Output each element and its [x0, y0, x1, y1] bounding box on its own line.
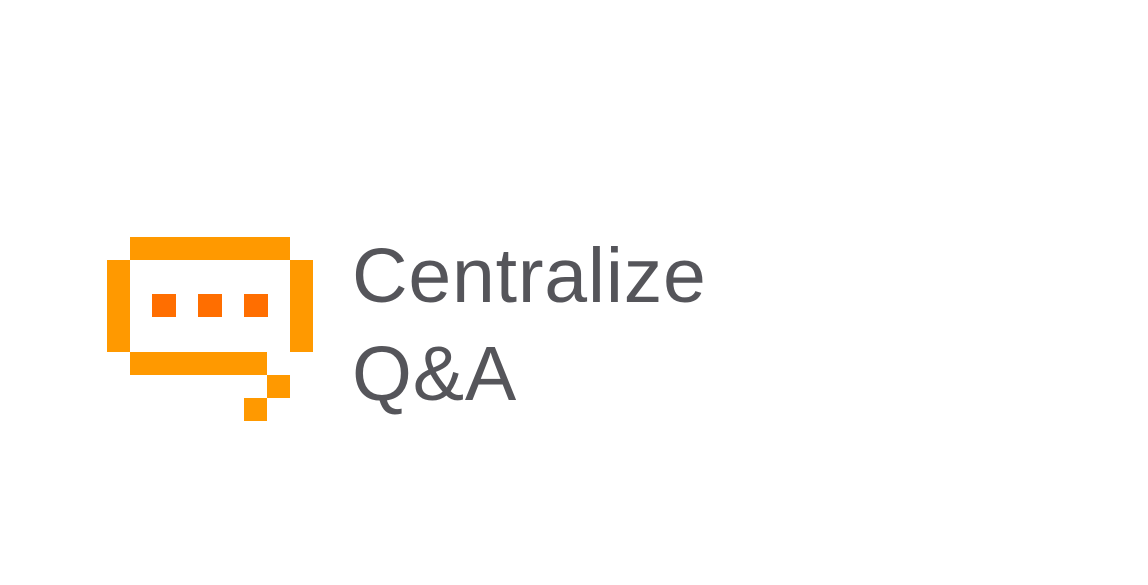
- icon: speech bubble: [107, 237, 313, 421]
- title: Centralize: [352, 233, 707, 319]
- title: [352, 233, 707, 417]
- icon: dots: [152, 294, 268, 317]
- title: Q&A: [352, 331, 517, 417]
